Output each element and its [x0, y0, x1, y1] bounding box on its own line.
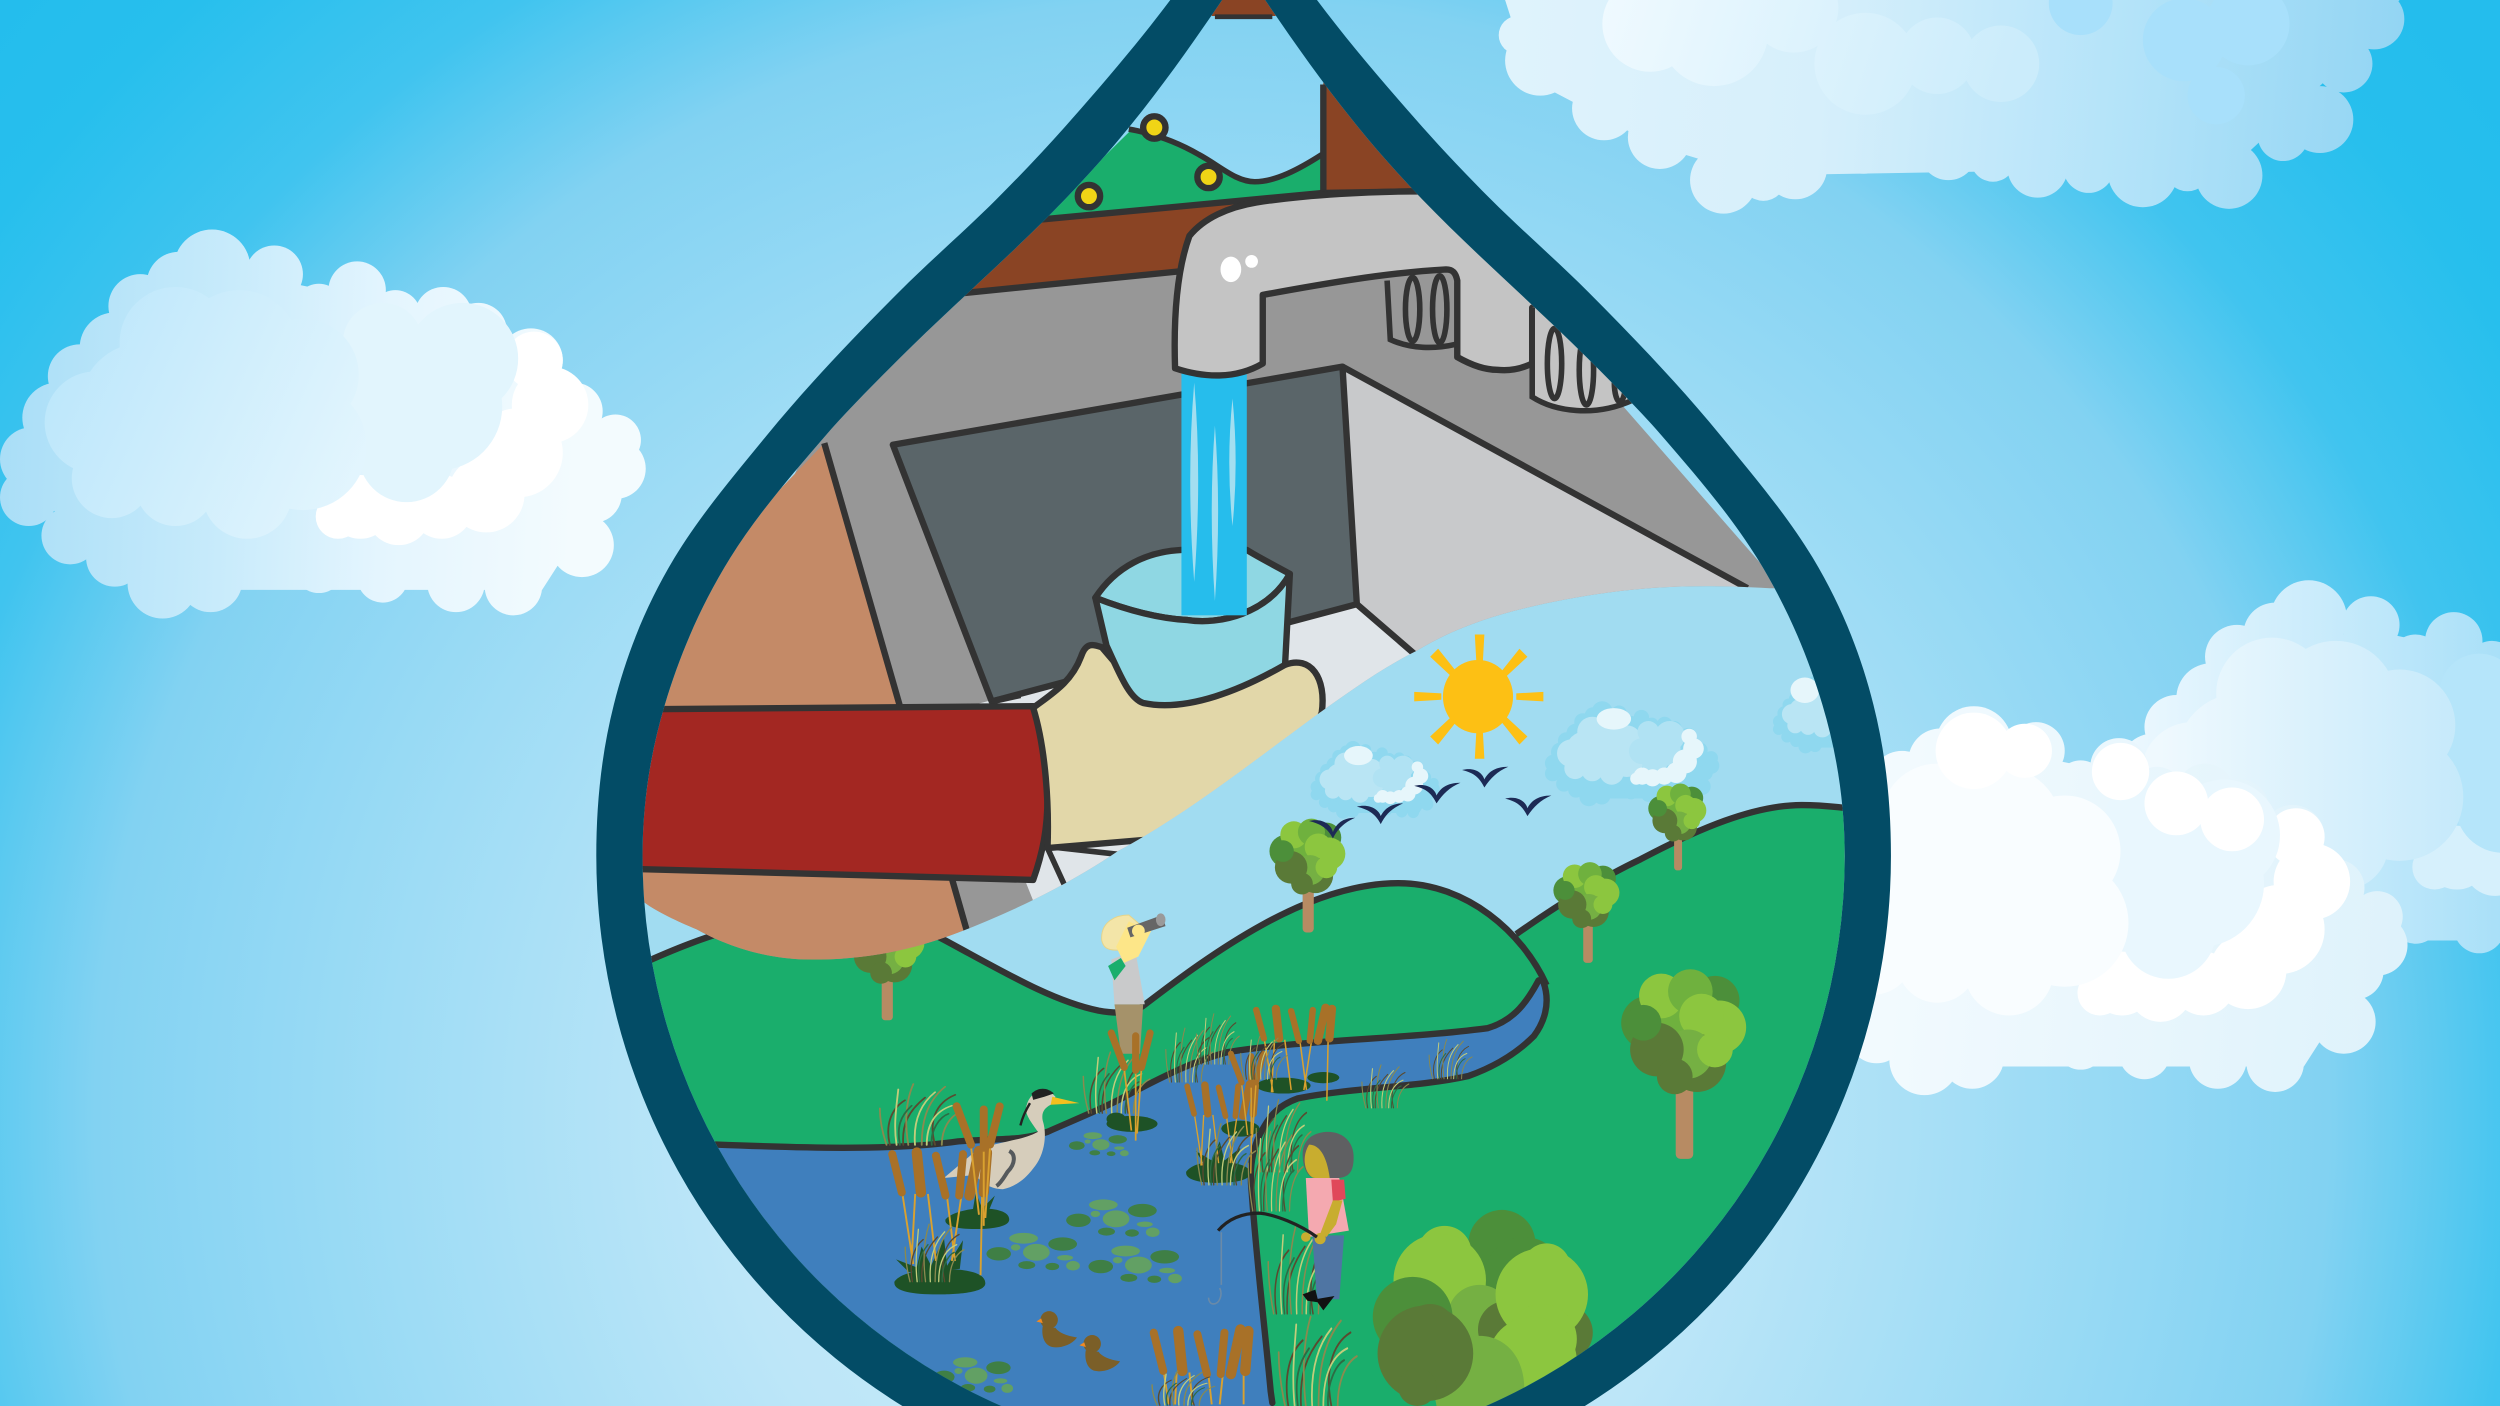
centre hill	[630, 883, 1547, 1406]
faucet grille left	[1387, 276, 1456, 347]
birds	[1309, 767, 1551, 838]
brown wall right	[1323, 80, 1435, 207]
counter divider line	[824, 443, 901, 709]
cloud darker pocket	[2049, 0, 2290, 124]
hand	[1033, 645, 1323, 848]
apex beam	[1212, 0, 1276, 16]
sink floor	[957, 604, 1467, 909]
water stream	[1181, 370, 1247, 615]
band top line	[1036, 191, 1422, 220]
grass tufts on bank	[880, 1014, 1472, 1145]
drop contents clipped to drop	[642, 0, 1845, 1406]
sink right wall	[1342, 367, 1881, 733]
faucet	[1175, 191, 1658, 383]
vertical post	[1321, 84, 1325, 193]
grey wall	[558, 191, 1881, 988]
distant green hill	[1020, 129, 1322, 239]
cattails	[892, 1007, 1332, 1404]
cloud: right lower	[1762, 706, 2408, 1095]
hill outline	[1129, 129, 1322, 182]
sun	[1414, 634, 1543, 759]
person fishing	[1209, 1132, 1354, 1310]
grass tufts in river	[905, 1036, 1357, 1406]
small apex line	[1215, 15, 1272, 18]
small sky cloud far right	[1773, 676, 1833, 754]
cloud: right upper	[2097, 580, 2500, 969]
drop right band	[1265, 0, 1891, 1406]
ducks	[1036, 1311, 1120, 1371]
kitchen cut-away, clipped by wave	[558, 0, 1881, 988]
bush foreground	[1373, 1210, 1593, 1406]
faucet highlights	[1221, 255, 1258, 282]
tree: centre hill	[1269, 819, 1345, 933]
sink back wall	[893, 367, 1357, 701]
cloud: top right	[1499, 0, 2404, 214]
heron	[944, 1089, 1079, 1189]
sleeve	[630, 706, 1048, 880]
drop left band	[596, 0, 1222, 1406]
person with binoculars	[1102, 913, 1165, 1054]
tree: right hill	[1553, 862, 1619, 963]
lower counter line	[952, 878, 968, 934]
faucet grille right	[1532, 303, 1658, 411]
cup	[1095, 550, 1290, 705]
small sky cloud right	[1545, 701, 1719, 806]
right hill	[1244, 805, 1881, 1406]
wall top line	[961, 271, 1183, 293]
fishing rod	[1218, 1213, 1317, 1237]
tan counter upper	[638, 443, 901, 709]
tree: big right	[1621, 969, 1746, 1159]
marsh mounds	[894, 1072, 1339, 1294]
flower dots	[1078, 116, 1220, 207]
fishing line and hook	[1209, 1232, 1221, 1304]
small sky cloud left	[1311, 741, 1440, 819]
tree: left behind hand	[854, 944, 924, 1020]
river banks	[716, 980, 1547, 1403]
floor lines front	[1048, 846, 1119, 886]
water drop outline	[596, 0, 1891, 1406]
tan counter lower	[630, 861, 976, 972]
sink edge lines	[992, 367, 1747, 701]
tree: top right	[1648, 784, 1706, 870]
outdoor sky panel	[644, 587, 1844, 1036]
cloud upper lighter puffs	[1602, 0, 2039, 115]
cloud white top humps	[1936, 713, 2264, 851]
cloud: left	[0, 230, 646, 619]
river	[686, 980, 1548, 1406]
brown band	[941, 188, 1435, 303]
lily pads	[934, 1132, 1182, 1393]
